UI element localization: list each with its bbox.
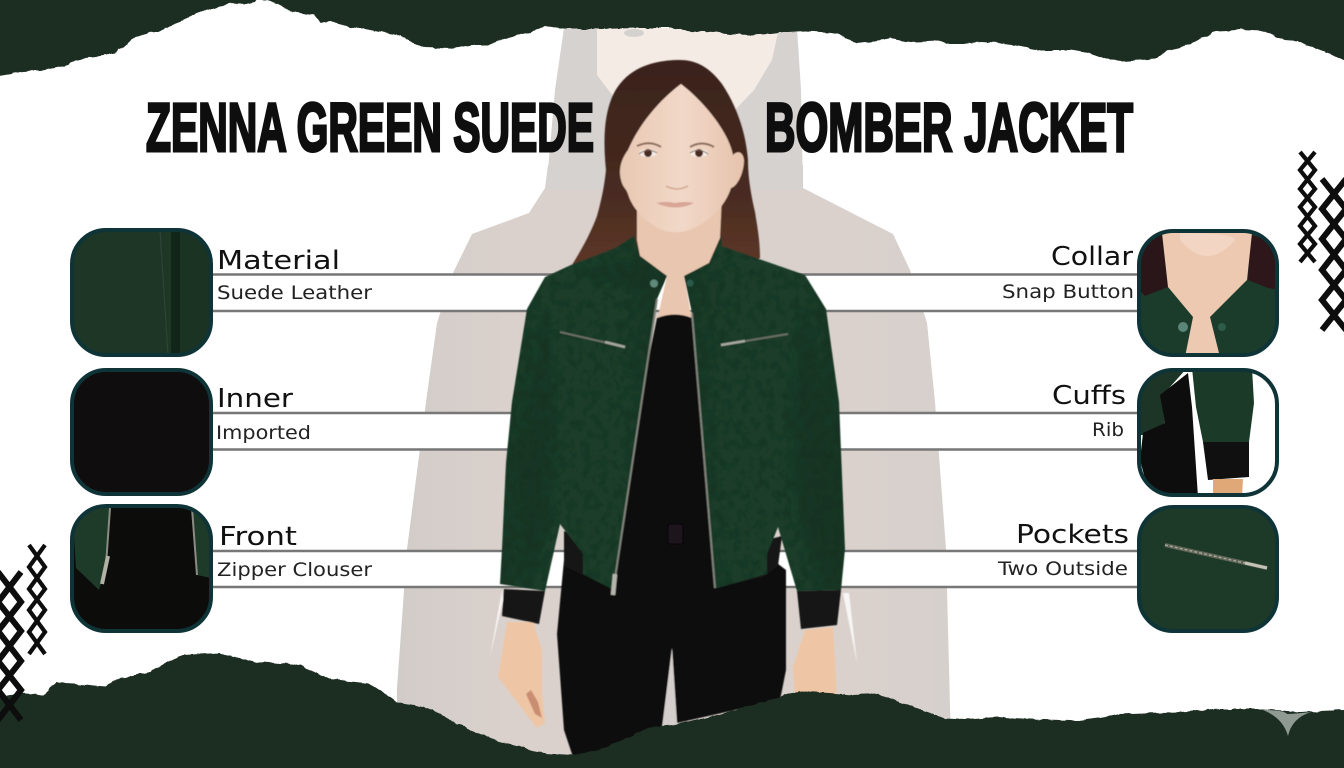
chest pocket zippers xyxy=(560,332,788,347)
decorative cross pattern: bottom left, outer xyxy=(0,572,21,720)
label: cuffs: Rib xyxy=(1092,419,1124,441)
hair xyxy=(572,60,760,268)
panel: front thumbnail xyxy=(70,504,213,633)
torn paper footer xyxy=(0,653,1344,768)
torn paper header xyxy=(0,0,1344,76)
face xyxy=(620,84,744,232)
faded background portrait xyxy=(397,28,952,768)
cuffs xyxy=(502,589,841,629)
hem ribbing xyxy=(564,531,782,588)
decorative cross pattern: top right, inner xyxy=(1300,152,1315,262)
feature band: material xyxy=(213,275,1137,311)
inseam gap xyxy=(662,648,677,730)
label: pockets xyxy=(997,520,1129,580)
label: cuffs xyxy=(1052,381,1126,441)
nose and mouth xyxy=(656,186,694,208)
label: front xyxy=(217,522,372,581)
hands xyxy=(498,622,837,728)
panel: material thumbnail xyxy=(70,228,213,357)
label: cuffs: Cuffs xyxy=(1052,381,1126,411)
label: collar: Snap Button xyxy=(1002,281,1134,303)
panel: collar thumbnail xyxy=(1137,229,1279,357)
feature band: front xyxy=(213,551,1137,587)
snap buttons xyxy=(650,280,694,288)
label: inner: Inner xyxy=(217,384,293,414)
jacket shading xyxy=(518,262,828,580)
label: front: Zipper Clouser xyxy=(217,559,372,581)
band rules xyxy=(213,274,1137,587)
sparkle watermark xyxy=(1263,710,1311,736)
jacket left panel xyxy=(500,236,667,591)
neck xyxy=(637,195,722,320)
model wearing the green suede bomber jacket xyxy=(490,60,857,760)
title: ZENNA GREEN SUEDE xyxy=(146,89,594,166)
front zipper xyxy=(613,299,715,595)
label: pockets: Two Outside xyxy=(997,558,1128,580)
jacket right panel xyxy=(684,236,845,591)
label: front: Front xyxy=(219,522,297,552)
label: pockets: Pockets xyxy=(1016,520,1129,550)
jeans and top xyxy=(557,314,786,760)
decorative cross pattern: bottom left, inner xyxy=(29,545,45,654)
decorative cross pattern: top right, outer xyxy=(1322,179,1344,330)
jeans button xyxy=(668,524,683,544)
panel: pockets thumbnail xyxy=(1137,505,1279,633)
label: collar: Collar xyxy=(1051,242,1133,272)
label: inner: Imported xyxy=(216,422,311,444)
jacket xyxy=(500,236,845,591)
arm highlights xyxy=(490,590,857,663)
label: collar xyxy=(1002,242,1134,303)
label: inner xyxy=(216,384,311,444)
panel: cuffs thumbnail xyxy=(1137,368,1279,497)
feature band: inner xyxy=(213,413,1137,449)
eyes and brows xyxy=(637,143,714,157)
label: material: Suede Leather xyxy=(217,282,372,304)
panel: inner thumbnail xyxy=(70,368,213,496)
label: material xyxy=(217,246,372,304)
label: material: Material xyxy=(217,246,340,276)
